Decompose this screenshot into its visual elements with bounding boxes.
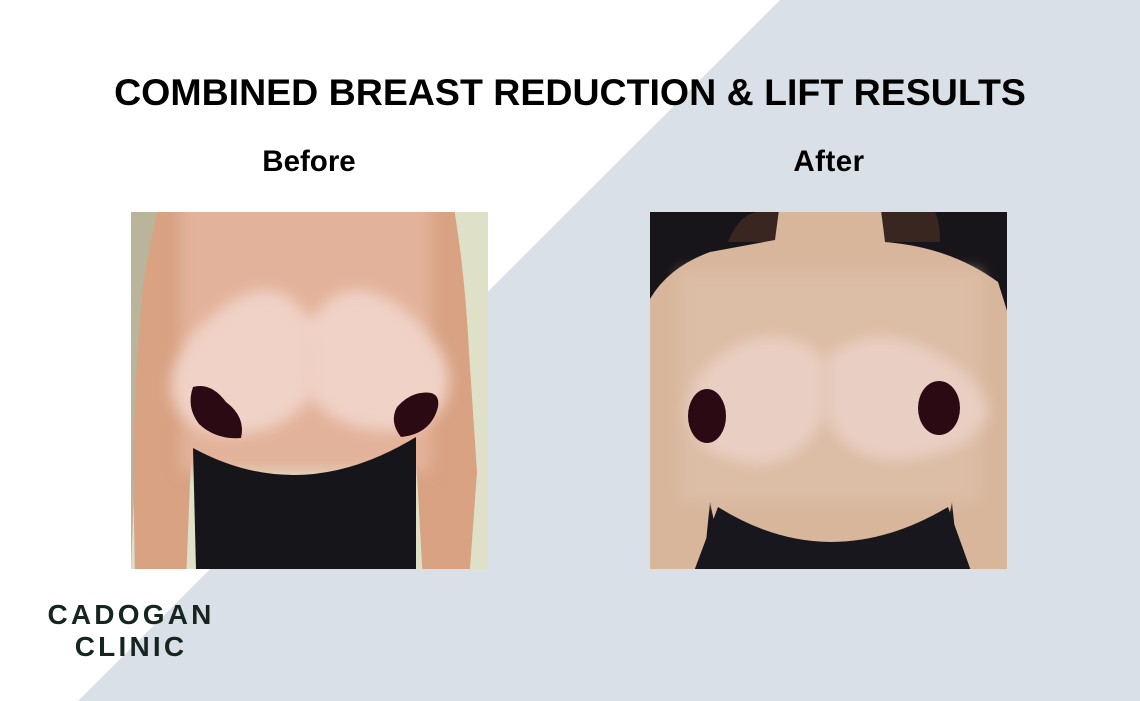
- title: COMBINED BREAST REDUCTION & LIFT RESULTS: [114, 71, 1026, 113]
- logo: CADOGAN: [47, 599, 215, 630]
- panel: before photo (schematic): [131, 212, 488, 569]
- panel: after photo (schematic): [650, 212, 1007, 569]
- heading: before: Before: [262, 145, 356, 178]
- heading: after: After: [793, 145, 865, 178]
- logo: [47, 599, 215, 662]
- logo: CLINIC: [75, 631, 187, 662]
